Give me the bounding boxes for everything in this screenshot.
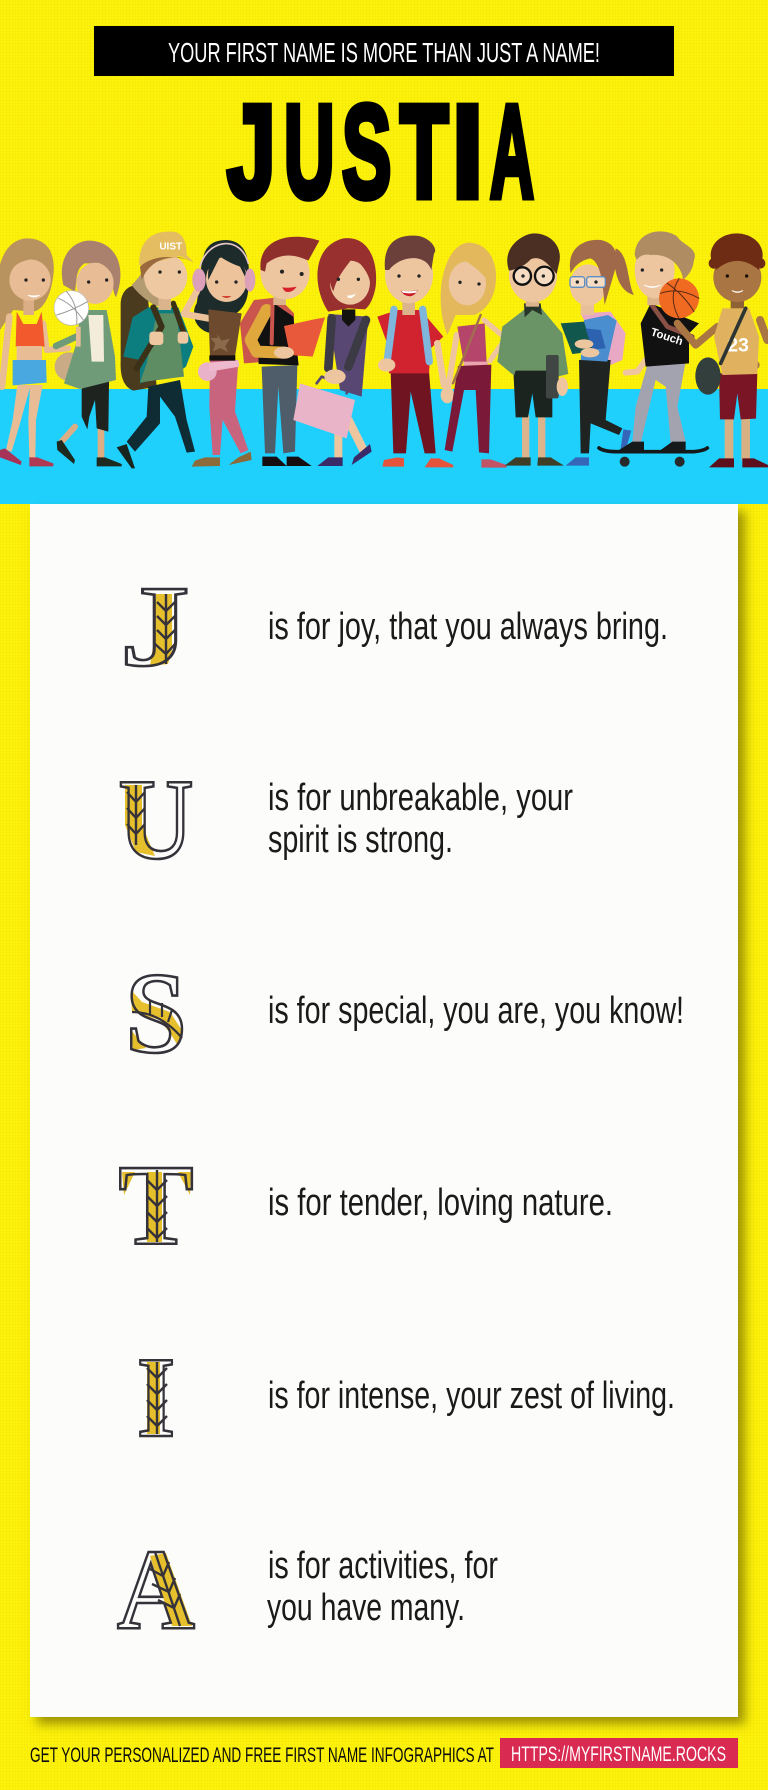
person 7: boy in red shirt [377,236,453,467]
person 3: hiker with backpack and cap [117,231,195,468]
statement A: you have many. [267,1587,465,1629]
row I [137,1334,675,1462]
row S [125,949,684,1078]
statement A: is for activities, for [268,1545,498,1587]
title: JUSTIA: I [452,78,483,225]
person 4: girl with pink headphones [184,240,255,467]
white content panel [30,504,738,1717]
person 5: boy reading a book [240,237,325,466]
letter S with wheat pattern: S [125,949,187,1078]
title: JUSTIA: J [227,78,275,225]
footer [30,1738,738,1768]
person 3: hiker with backpack and cap: UIST [159,241,182,252]
row T [118,1140,613,1269]
row A [117,1525,498,1654]
statement U: is for unbreakable, your [268,777,573,819]
right six people [377,231,768,468]
url badge [500,1738,738,1768]
blue floor band [0,389,768,504]
person 9: boy with glasses [497,233,568,466]
person 1: girl in orange top [0,238,68,466]
illustration: group of twelve young people [0,231,768,468]
row U [118,755,573,883]
letter I with wheat pattern: I [137,1334,175,1462]
person 10: girl with tablet and ponytail [561,240,634,466]
person 11: skateboarder with basketball [599,231,717,467]
row J [120,562,668,690]
statement U [268,777,573,861]
title: JUSTIA: S [342,78,391,225]
person 6: girl with pink bag [293,238,376,466]
person 2: girl with volleyball [54,241,122,466]
title: JUSTIA [226,78,534,225]
letter U with wheat pattern: U [118,755,194,883]
statement A [267,1545,498,1629]
letter A with wheat pattern: A [117,1525,195,1654]
letter J with wheat pattern: J [120,562,190,690]
person 12: boy in tank top with shoulder bag [695,233,768,467]
left six people [0,231,376,468]
title: JUSTIA: U [284,78,335,225]
person 8: blonde girl in maroon trousers [441,243,507,468]
title: JUSTIA: T [400,78,448,225]
person 12: boy in tank top with shoulder bag: 23 [727,336,749,357]
banner: tagline [94,26,674,76]
footer call to action: GET YOUR PERSONALIZED AND FREE FIRST NAME INFOGRAPHICS AT [30,1744,494,1767]
statement T: is for tender, loving nature. [268,1182,613,1224]
statement U: spirit is strong. [268,819,453,861]
title: JUSTIA: A [490,78,534,225]
letter T with wheat pattern: T [118,1140,194,1269]
person 11: skateboarder with basketball: Touch [649,326,684,348]
